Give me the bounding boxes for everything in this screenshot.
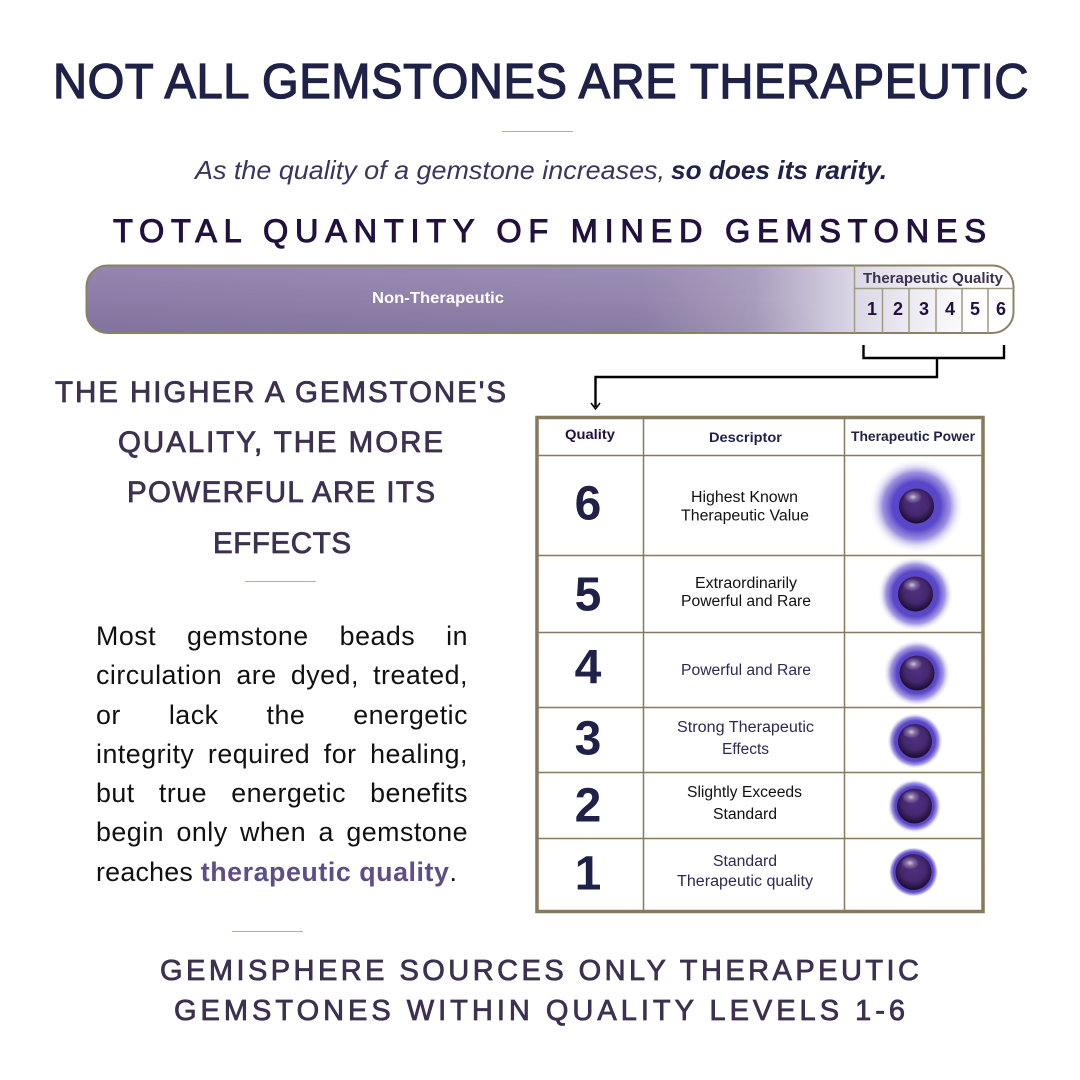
descriptors: Effects <box>722 741 769 758</box>
quality digits: 6 <box>996 299 1006 319</box>
body paragraph: begin only when a gemstone <box>96 817 468 847</box>
icon: therapeutic power orb level 3 <box>887 713 943 769</box>
heading: quality and effects: THE HIGHER A GEMSTONE'S <box>55 376 506 409</box>
quantity bar <box>86 265 1014 333</box>
bar heading: TOTAL QUANTITY OF MINED GEMSTONES <box>113 213 986 249</box>
subtitle <box>193 155 887 185</box>
quality digits: 2 <box>893 299 903 319</box>
quality digits: 3 <box>919 299 929 319</box>
icon: therapeutic power orb level 6 <box>868 458 964 554</box>
title: NOT ALL GEMSTONES ARE THERAPEUTIC <box>53 55 1029 109</box>
body paragraph: Most gemstone beads in <box>96 621 468 651</box>
therapeutic quality label: Therapeutic Quality <box>863 270 1004 287</box>
subtitle: As the quality of a gemstone increases, <box>193 155 665 185</box>
quality numbers: 6 <box>575 478 601 530</box>
icon: therapeutic power orb level 4 <box>883 639 951 707</box>
quality numbers: 3 <box>575 712 601 766</box>
descriptors: Therapeutic Value <box>681 508 809 524</box>
quality numbers: 2 <box>575 780 601 832</box>
table headers: Descriptor <box>709 429 783 445</box>
heading: quality and effects: POWERFUL ARE ITS <box>127 476 435 509</box>
body paragraph <box>96 621 468 887</box>
icon: therapeutic power orb level 2 <box>888 779 942 833</box>
descriptors: Slightly Exceeds <box>687 784 802 801</box>
body paragraph: but true energetic benefits <box>96 778 468 808</box>
icon: therapeutic power orb level 1 <box>888 847 938 897</box>
quality numbers <box>575 478 602 900</box>
body paragraph: integrity required for healing, <box>96 739 468 769</box>
heading: quality and effects <box>55 376 506 560</box>
descriptors: Powerful and Rare <box>681 662 811 679</box>
descriptors: Powerful and Rare <box>681 593 811 610</box>
descriptors: Therapeutic quality <box>677 873 813 890</box>
closing statement: GEMSTONES WITHIN QUALITY LEVELS 1-6 <box>174 995 905 1027</box>
closing statement <box>160 955 919 1027</box>
heading: quality and effects: EFFECTS <box>213 527 351 560</box>
descriptors <box>677 489 814 890</box>
quality numbers: 5 <box>575 568 601 622</box>
quality numbers: 1 <box>575 848 601 900</box>
descriptors: Strong Therapeutic <box>677 719 814 736</box>
body paragraph: circulation are dyed, treated, <box>96 660 468 690</box>
descriptors: Extraordinarily <box>695 575 797 592</box>
descriptors: Highest Known <box>691 489 798 506</box>
non-therapeutic label: Non-Therapeutic <box>372 290 504 307</box>
quality digits: 4 <box>945 299 955 319</box>
table headers: Quality <box>565 426 615 442</box>
quality numbers: 4 <box>575 642 602 694</box>
quality digits: 5 <box>970 299 980 319</box>
descriptors: Standard <box>713 853 777 870</box>
table headers <box>565 426 976 445</box>
arrow: bracket to table <box>591 345 1004 409</box>
subtitle: so does its rarity. <box>671 155 887 185</box>
quality digits: 1 <box>867 299 877 319</box>
icon: therapeutic power orb level 5 <box>878 556 954 632</box>
body paragraph: reaches therapeutic quality. <box>96 857 457 887</box>
heading: quality and effects: QUALITY, THE MORE <box>118 426 443 459</box>
closing statement: GEMISPHERE SOURCES ONLY THERAPEUTIC <box>160 955 919 987</box>
quality table <box>537 418 983 912</box>
descriptors: Standard <box>713 806 777 823</box>
body paragraph: or lack the energetic <box>96 700 468 730</box>
table headers: Therapeutic Power <box>851 428 976 444</box>
quality digits <box>867 299 1006 319</box>
